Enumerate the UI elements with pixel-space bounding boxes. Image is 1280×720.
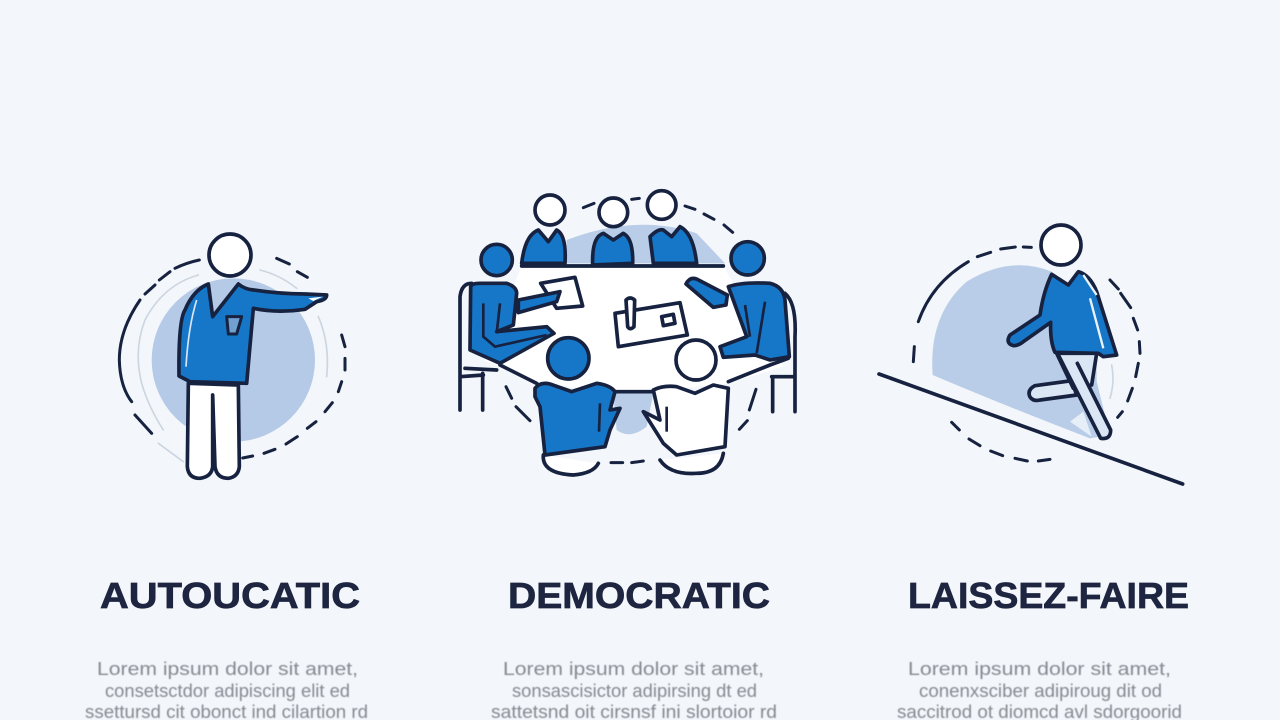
- backdrop shapes: [567, 225, 725, 434]
- column: laissez-faire text: [897, 575, 1189, 720]
- right person: [686, 242, 789, 360]
- head: [1041, 225, 1081, 265]
- body text: laissez-faire: [897, 658, 1182, 720]
- heading: democratic: DEMOCRATIC: [508, 575, 770, 616]
- torso and pointing arm: [179, 284, 327, 383]
- chairs: [460, 283, 795, 412]
- light accent line: [1110, 365, 1113, 398]
- top person two: [593, 198, 633, 265]
- body text: autocratic: consetsctdor adipiscing elit ed: [105, 680, 350, 701]
- body text: democratic: [491, 658, 777, 720]
- bottom right person: [643, 340, 728, 473]
- head: [209, 234, 251, 276]
- legs: [187, 383, 239, 478]
- back leg: [1029, 381, 1077, 400]
- top person three: [647, 191, 697, 263]
- body text: autocratic: Lorem ipsum dolor sit amet,: [97, 658, 358, 679]
- blue backdrop disk: [152, 278, 315, 442]
- foot highlight wedge: [1070, 412, 1092, 437]
- heading: autocratic: AUTOUCATIC: [100, 575, 360, 616]
- body text: democratic: Lorem ipsum dolor sit amet,: [503, 658, 764, 679]
- bottom left person: [535, 338, 620, 475]
- round table: [483, 266, 783, 392]
- body text: laissez-faire: conenxsciber adipiroug dit od: [919, 680, 1162, 701]
- shirt pocket: [227, 317, 242, 334]
- body text: democratic: sonsascisictor adipirsing dt ed: [512, 680, 757, 701]
- column: autocratic text: [85, 575, 368, 720]
- icon: democratic team around table: [460, 191, 795, 475]
- small note: [662, 314, 675, 326]
- dashed ring: [506, 198, 756, 463]
- pointing fingertip: [308, 297, 323, 301]
- front leg: [1058, 355, 1111, 439]
- dashed ring: [913, 247, 1140, 461]
- column: democratic text: [491, 575, 777, 720]
- heading: laissez-faire: LAISSEZ-FAIRE: [908, 575, 1189, 616]
- slope line: [879, 374, 1183, 484]
- body text: autocratic: [85, 658, 368, 720]
- pen: [626, 298, 635, 329]
- top person one: [522, 195, 565, 263]
- icon: autocratic leader pointing: [119, 234, 345, 478]
- torso and arms: [1008, 272, 1117, 357]
- left person forearm: [518, 292, 560, 313]
- table top edge: [522, 260, 723, 271]
- document on table: [615, 303, 687, 347]
- dashed outer ring: [119, 258, 345, 458]
- backdrop disk: [932, 265, 1110, 438]
- hips: [1057, 353, 1097, 388]
- body text: laissez-faire: Lorem ipsum dolor sit amet,: [908, 658, 1171, 679]
- paper on table: [541, 277, 583, 308]
- left person: [470, 244, 554, 363]
- table lower edges: [500, 358, 788, 392]
- sleeve highlight: [1083, 275, 1103, 348]
- sleeve highlight: [186, 300, 197, 367]
- icon: laissez-faire figure on slope: [879, 225, 1183, 484]
- light inner ring: [138, 270, 327, 462]
